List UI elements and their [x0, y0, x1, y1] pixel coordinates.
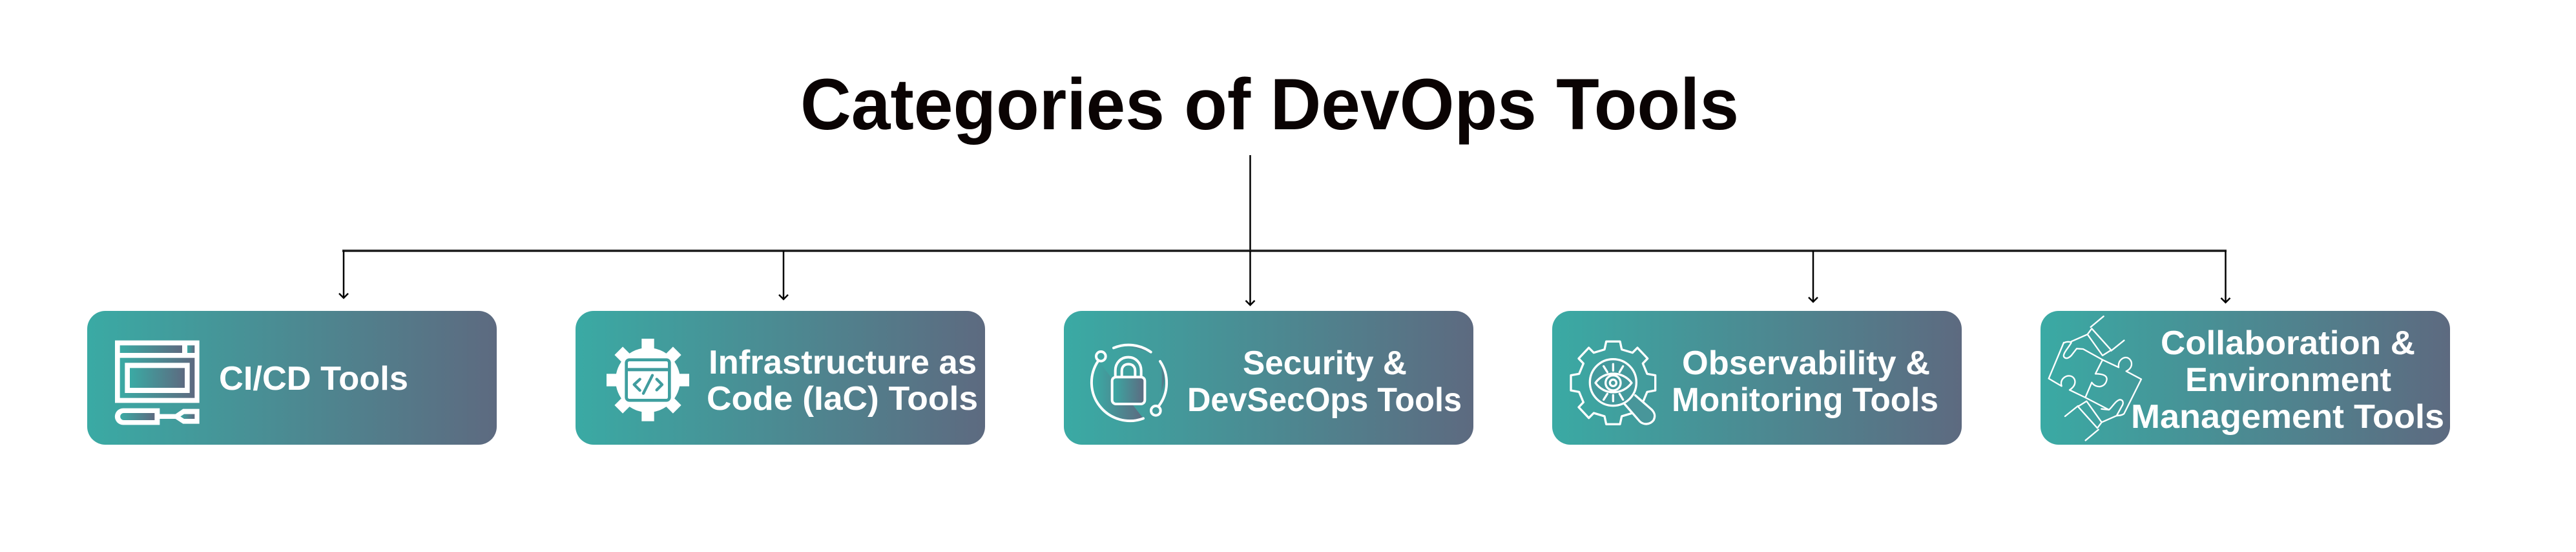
label [2131, 324, 2444, 436]
arrow: Collaboration [2221, 251, 2230, 303]
panel: Observability & Monitoring [1552, 311, 1962, 445]
label: DevSecOps Tools [1187, 381, 1462, 419]
arrow: IaC [779, 251, 788, 299]
arrow: Observability [1809, 251, 1818, 302]
label [1672, 345, 1938, 419]
arrow: Security [1245, 251, 1254, 305]
label: Security & [1243, 345, 1407, 382]
tree connector with arrows [339, 155, 2230, 305]
label: Collaboration & [2161, 324, 2415, 362]
icon: window and screwdriver [115, 341, 200, 425]
label: CI/CD Tools [219, 360, 408, 398]
label: Code (IaC) Tools [707, 380, 978, 418]
label: Infrastructure as [709, 344, 977, 381]
panel: Infrastructure as Code [576, 311, 985, 445]
icon: hands joining puzzle pieces [2049, 316, 2141, 440]
label: Environment [2185, 361, 2391, 399]
icon: padlock with orbit [1092, 345, 1167, 421]
title: Categories of DevOps Tools [800, 64, 1739, 145]
panel: CI/CD Tools [87, 311, 497, 445]
panel: Collaboration & Environment [2041, 311, 2450, 445]
label: Observability & [1682, 345, 1930, 382]
label [707, 344, 978, 418]
panel: Security & DevSecOps [1064, 311, 1473, 445]
label: Monitoring Tools [1672, 381, 1938, 419]
label: Management Tools [2131, 398, 2444, 436]
arrow: CI/CD [339, 251, 348, 298]
icon: gear with magnifier and eye [1571, 341, 1656, 424]
icon: gear with code window [607, 339, 689, 421]
label [1187, 345, 1462, 419]
